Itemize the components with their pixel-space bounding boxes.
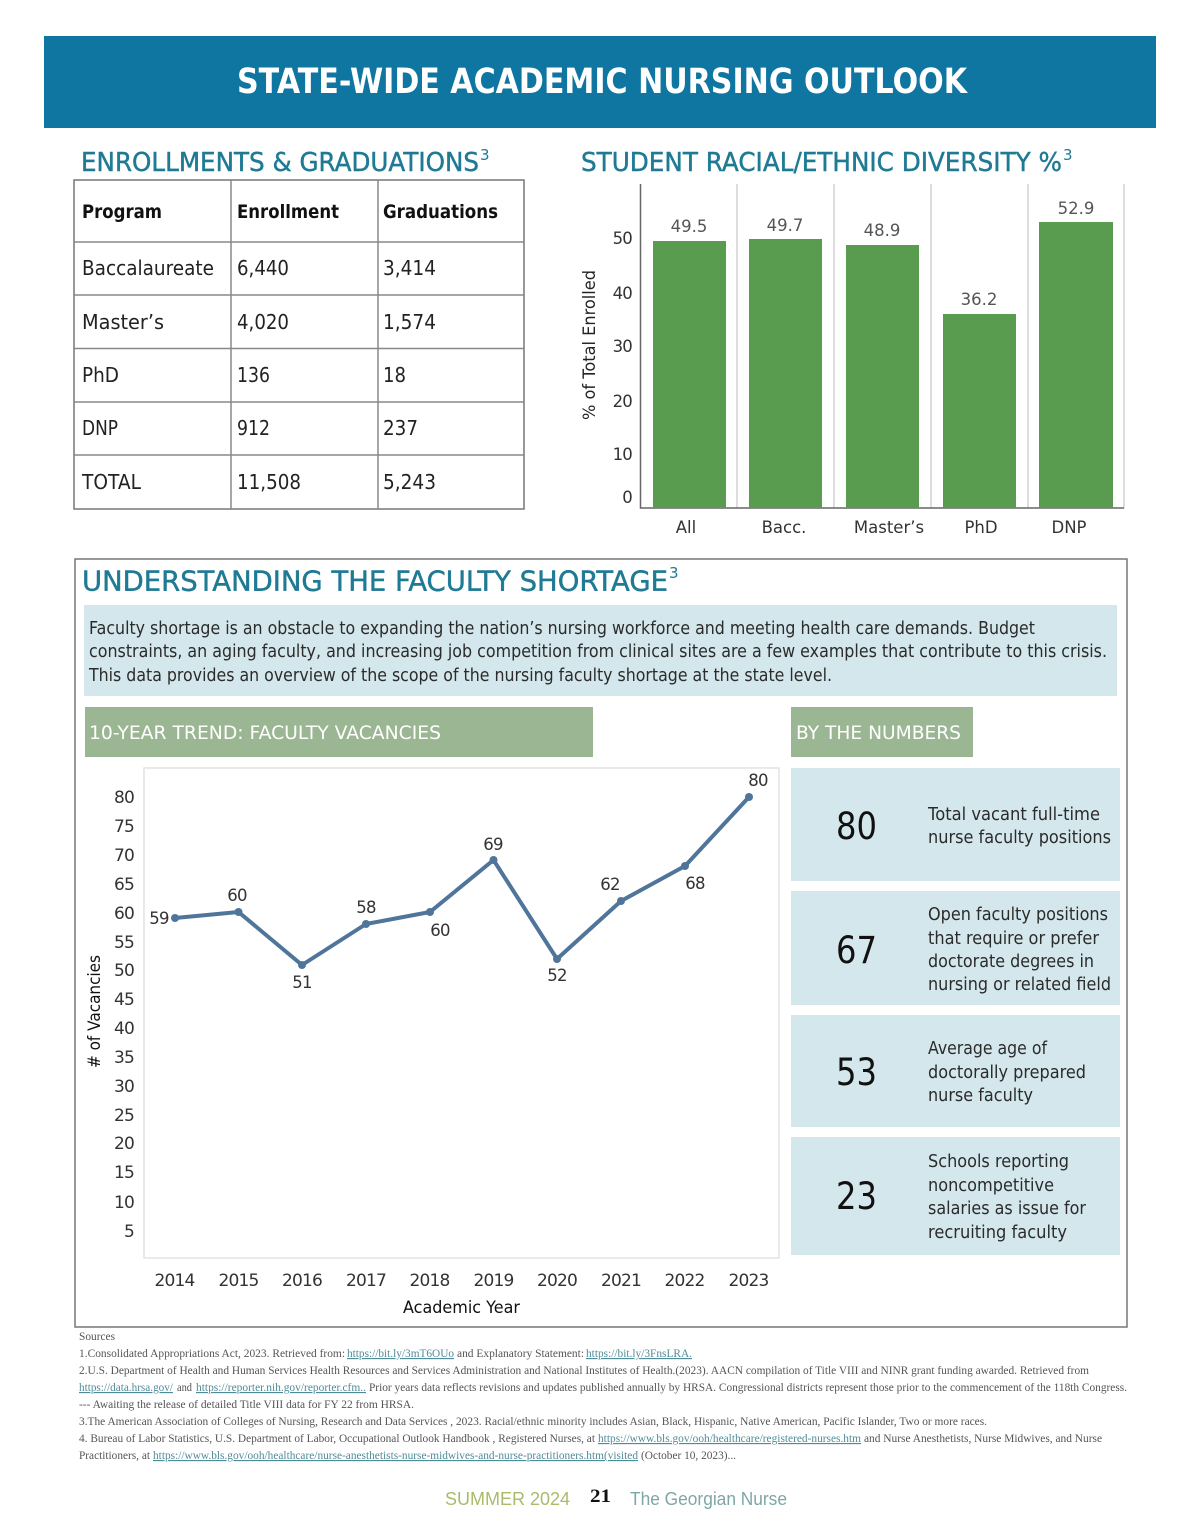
y axis title: % of Total Enrolled	[580, 270, 599, 420]
trend line	[175, 797, 749, 965]
x axis labels: 2016	[282, 1271, 322, 1291]
x axis labels: 2021	[601, 1271, 641, 1291]
y axis ticks: 45	[114, 990, 134, 1010]
sources text block: https://reporter.nih.gov/reporter.cfm..	[196, 1382, 366, 1394]
stat card: 67: that require or prefer	[928, 929, 1100, 949]
x axis labels: Bacc.	[762, 518, 806, 537]
x axis labels	[154, 1271, 769, 1291]
y axis ticks: 40	[613, 284, 632, 303]
data labels: 60	[430, 921, 450, 940]
table: enrollments and graduations: 237	[383, 416, 418, 440]
data labels: 60	[227, 886, 247, 905]
stat card: 53: Average age of	[928, 1039, 1048, 1059]
sources text block: 3.The American Association of Colleges of Nursing, Research and Data Services , 2023. Racial/ethnic minority includes Asian, Black, Hispanic, Native American, Pacific Islander, Two or more races.	[79, 1416, 987, 1428]
heading: faculty shortage: UNDERSTANDING THE FACULTY SHORTAGE	[82, 564, 668, 598]
stat card: 53: doctorally prepared	[928, 1063, 1086, 1083]
stat card: 67: Open faculty positions	[928, 905, 1108, 925]
x axis labels: All	[676, 518, 696, 537]
intro text box: This data provides an overview of the scope of the nursing faculty shortage at the state level.	[88, 665, 832, 686]
y axis ticks: 80	[114, 788, 134, 808]
table: enrollments and graduations: 136	[237, 363, 270, 387]
bar value labels: 36.2	[961, 290, 997, 309]
bar value labels: 49.5	[671, 217, 707, 236]
stat card: 67	[791, 891, 1120, 1005]
stat card: 23: 23	[836, 1175, 877, 1218]
y axis ticks: 55	[114, 933, 134, 953]
y axis ticks	[613, 229, 632, 507]
table: enrollments and graduations: 4,020	[237, 310, 289, 334]
stat card: 67: 67	[836, 929, 877, 972]
y axis ticks: 15	[114, 1163, 134, 1183]
header: 10-year trend	[85, 707, 593, 757]
footer: The Georgian Nurse	[630, 1489, 787, 1509]
x axis labels: 2014	[154, 1271, 195, 1291]
bars	[653, 222, 1113, 508]
footer	[445, 1486, 787, 1509]
bar value labels: 48.9	[864, 221, 900, 240]
data points	[171, 793, 753, 969]
intro text box: Faculty shortage is an obstacle to expanding the nation’s nursing workforce and meeting health care demands. Budget	[89, 618, 1035, 639]
stat card: 23: salaries as issue for	[928, 1199, 1087, 1219]
sources text block: (October 10, 2023)...	[641, 1450, 736, 1462]
bar value labels	[671, 199, 1094, 309]
y axis ticks: 50	[613, 229, 632, 248]
table: enrollments and graduations	[74, 180, 524, 509]
table: enrollments and graduations: Master’s	[82, 310, 164, 334]
stat card: 23: Schools reporting	[928, 1152, 1069, 1172]
y axis ticks: 25	[114, 1106, 134, 1126]
x axis labels: 2017	[346, 1271, 386, 1291]
bar value labels: 49.7	[767, 216, 803, 235]
sources text block: 2.U.S. Department of Health and Human Services Health Resources and Services Administration and National Institutes of Health.(2023). AACN compilation of Title VIII and NINR grant funding awarded. Retrieved from	[79, 1365, 1089, 1377]
y axis ticks: 10	[114, 1193, 134, 1213]
y axis ticks: 10	[613, 445, 632, 464]
sources text block: 4. Bureau of Labor Statistics, U.S. Department of Labor, Occupational Outlook Handbook , Registered Nurses, at	[79, 1433, 596, 1445]
stat card: 23: noncompetitive	[928, 1176, 1054, 1196]
y axis ticks: 30	[613, 337, 632, 356]
title banner	[44, 36, 1156, 128]
stat card: 67: nursing or related field	[928, 975, 1111, 995]
sources text block: --- Awaiting the release of detailed Title VIII data for FY 22 from HRSA.	[79, 1399, 414, 1411]
sources text block: https://www.bls.gov/ooh/healthcare/registered-nurses.htm	[598, 1433, 861, 1445]
stat card: 53: nurse faculty	[928, 1086, 1033, 1106]
y axis title: # of Vacancies	[85, 955, 105, 1068]
panel: faculty shortage	[75, 559, 1127, 1327]
x axis labels: 2022	[664, 1271, 705, 1291]
bar chart: student diversity	[580, 184, 1124, 537]
stat card: 53	[791, 1015, 1120, 1127]
footer: 21	[590, 1486, 611, 1507]
stat card: 23: recruiting faculty	[928, 1223, 1067, 1243]
x axis labels: 2018	[409, 1271, 450, 1291]
table: enrollments and graduations: 1,574	[383, 310, 436, 334]
table: enrollments and graduations: Graduations	[383, 201, 498, 223]
y axis ticks: 35	[114, 1048, 134, 1068]
stat card: 67: doctorate degrees in	[928, 952, 1094, 972]
line chart: faculty vacancies	[85, 768, 779, 1318]
sources text block: https://data.hrsa.gov/	[79, 1382, 174, 1394]
x axis labels: 2019	[473, 1271, 514, 1291]
sources text block: https://www.bls.gov/ooh/healthcare/nurse-anesthetists-nurse-midwives-and-nurse-practitioners.htm(visited	[153, 1450, 638, 1462]
data labels: 58	[356, 898, 376, 917]
x axis labels: 2020	[537, 1271, 577, 1291]
stat card: 80: Total vacant full-time	[927, 805, 1100, 825]
y axis ticks: 40	[114, 1019, 134, 1039]
sources text block: Sources	[79, 1331, 116, 1343]
sources text block	[79, 1331, 1127, 1462]
sources text block: Prior years data reflects revisions and updates published annually by HRSA. Congressional districts represent those prior to the commencement of the 118th Congress.	[369, 1382, 1127, 1394]
sources text block: https://bit.ly/3FnsLRA.	[586, 1348, 692, 1360]
x axis labels: Master’s	[854, 518, 924, 537]
intro text box	[84, 605, 1117, 696]
header: by the numbers	[791, 707, 973, 757]
sources text block: and Nurse Anesthetists, Nurse Midwives, and Nurse	[864, 1433, 1102, 1445]
table: enrollments and graduations: 3,414	[383, 256, 436, 280]
stat card: 23	[791, 1137, 1120, 1255]
table: enrollments and graduations: 18	[383, 363, 406, 387]
data labels: 59	[149, 909, 169, 928]
y axis ticks: 65	[114, 875, 134, 895]
stat card: 80: nurse faculty positions	[928, 828, 1111, 848]
y axis ticks: 20	[114, 1134, 134, 1154]
x axis labels: 2023	[728, 1271, 769, 1291]
table: enrollments and graduations: 6,440	[237, 256, 289, 280]
table: enrollments and graduations: DNP	[82, 416, 118, 440]
y axis ticks: 30	[114, 1077, 134, 1097]
header: by the numbers: BY THE NUMBERS	[796, 722, 961, 744]
table: enrollments and graduations: Enrollment	[237, 201, 339, 223]
sources text block: and Explanatory Statement:	[457, 1348, 584, 1360]
y axis ticks: 60	[114, 904, 134, 924]
x axis title: Academic Year	[403, 1298, 520, 1318]
footer: SUMMER 2024	[445, 1489, 570, 1509]
y axis ticks: 50	[114, 961, 134, 981]
y axis ticks: 75	[114, 817, 134, 837]
heading: faculty shortage: 3	[669, 564, 679, 582]
table: enrollments and graduations: Baccalaureate	[82, 256, 214, 280]
table: enrollments and graduations: 11,508	[237, 470, 301, 494]
y axis ticks: 20	[613, 392, 632, 411]
y axis ticks	[114, 788, 134, 1242]
header: 10-year trend: 10-YEAR TREND: FACULTY VACANCIES	[89, 722, 441, 744]
bar value labels: 52.9	[1058, 199, 1094, 218]
table: enrollments and graduations: Program	[82, 201, 162, 223]
data labels: 52	[547, 966, 567, 985]
heading: student diversity: 3	[1063, 146, 1073, 164]
table: enrollments and graduations: 912	[237, 416, 270, 440]
y axis ticks: 70	[114, 846, 134, 866]
heading: enrollments and graduations: ENROLLMENTS & GRADUATIONS	[81, 148, 479, 178]
data labels: 80	[748, 771, 768, 790]
y axis ticks: 0	[622, 488, 632, 507]
sources text block: and	[177, 1382, 192, 1394]
table: enrollments and graduations: 5,243	[383, 470, 436, 494]
data labels: 69	[483, 835, 503, 854]
stat card: 53: 53	[836, 1051, 877, 1094]
data labels	[149, 771, 768, 992]
heading: enrollments and graduations: 3	[480, 146, 490, 164]
stat card: 80: 80	[836, 805, 877, 848]
x axis labels: PhD	[964, 518, 998, 537]
table: enrollments and graduations: PhD	[82, 363, 119, 387]
sources text block: 1.Consolidated Appropriations Act, 2023. Retrieved from:	[79, 1348, 345, 1360]
heading: student diversity: STUDENT RACIAL/ETHNIC DIVERSITY %	[581, 148, 1062, 178]
stat card: 80	[791, 768, 1120, 881]
x axis labels	[676, 518, 1087, 537]
data labels: 68	[685, 874, 705, 893]
data labels: 51	[292, 973, 312, 992]
title banner: STATE-WIDE ACADEMIC NURSING OUTLOOK	[237, 62, 969, 102]
sources text block: https://bit.ly/3mT6OUo	[347, 1348, 454, 1360]
table: enrollments and graduations: TOTAL	[81, 470, 142, 494]
y axis ticks: 5	[124, 1222, 134, 1242]
data labels: 62	[600, 875, 620, 894]
x axis labels: DNP	[1052, 518, 1087, 537]
x axis labels: 2015	[218, 1271, 259, 1291]
sources text block: Practitioners, at	[79, 1450, 151, 1462]
